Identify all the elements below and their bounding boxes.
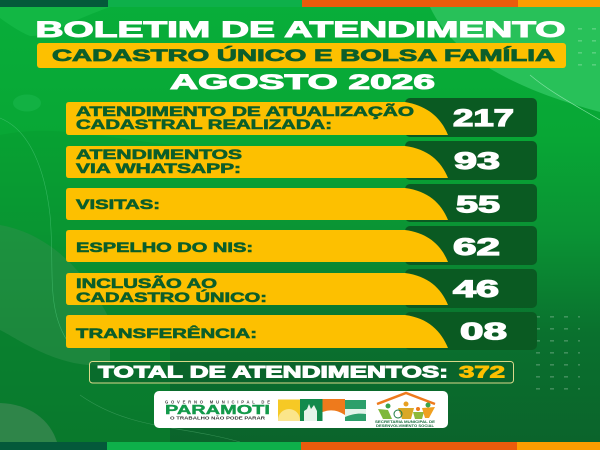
row: transferência: 08: [460, 318, 507, 346]
row: via whatsapp: 93: [454, 148, 500, 175]
row: visitas: VISITAS:: [76, 197, 160, 212]
row: via whatsapp: [66, 141, 537, 180]
row: atualização cadastral: [66, 98, 537, 137]
logo: Paramoti: GOVERNO MUNICIPAL DE: [165, 400, 270, 404]
row: inclusão: 46: [453, 276, 499, 303]
subtitle band: CADASTRO ÚNICO E BOLSA FAMÍLIA: [52, 46, 555, 65]
row: visitas: [66, 184, 537, 222]
logo: Paramoti: O TRABALHO NÃO PODE PARAR: [170, 416, 265, 420]
row: atualização cadastral: 217: [453, 105, 514, 132]
logo: Secretaria: [375, 393, 436, 428]
top colour stripe: [0, 0, 600, 7]
total box: 372: [459, 364, 505, 382]
logo: Secretaria: SECRETARIA MUNICIPAL DE: [375, 420, 436, 424]
total box: [90, 362, 514, 383]
row: visitas: 55: [456, 192, 500, 218]
row: via whatsapp: VIA WHATSAPP:: [76, 161, 241, 176]
icon: municipal flag squares: [278, 399, 366, 421]
logo: Paramoti: [165, 400, 270, 420]
row: transferência: TRANSFERÊNCIA:: [76, 326, 257, 341]
logo panel: [154, 391, 448, 428]
row: transferência: [66, 312, 537, 350]
logo: Paramoti: PARAMOTI: [165, 403, 270, 417]
row: inclusão: CADASTRO ÚNICO:: [76, 290, 267, 305]
logo: Secretaria: DESENVOLVIMENTO SOCIAL: [376, 424, 435, 428]
total box: TOTAL DE ATENDIMENTOS:: [98, 364, 448, 382]
row: inclusão: INCLUSÃO AO: [76, 276, 217, 291]
subtitle band: [37, 43, 566, 68]
row: atualização cadastral: CADASTRAL REALIZADA:: [76, 117, 332, 132]
row: espelho do nis: [66, 226, 537, 265]
date heading: AGOSTO 2026: [170, 71, 435, 94]
bottom colour stripe: [0, 442, 600, 450]
row: inclusão: [66, 269, 537, 308]
row: espelho do nis: ESPELHO DO NIS:: [76, 240, 253, 255]
row: via whatsapp: ATENDIMENTOS: [76, 147, 242, 162]
title: BOLETIM DE ATENDIMENTO: [36, 17, 566, 42]
row: atualização cadastral: ATENDIMENTO DE ATUALIZAÇÃO: [76, 104, 414, 119]
row: espelho do nis: 62: [453, 234, 500, 261]
